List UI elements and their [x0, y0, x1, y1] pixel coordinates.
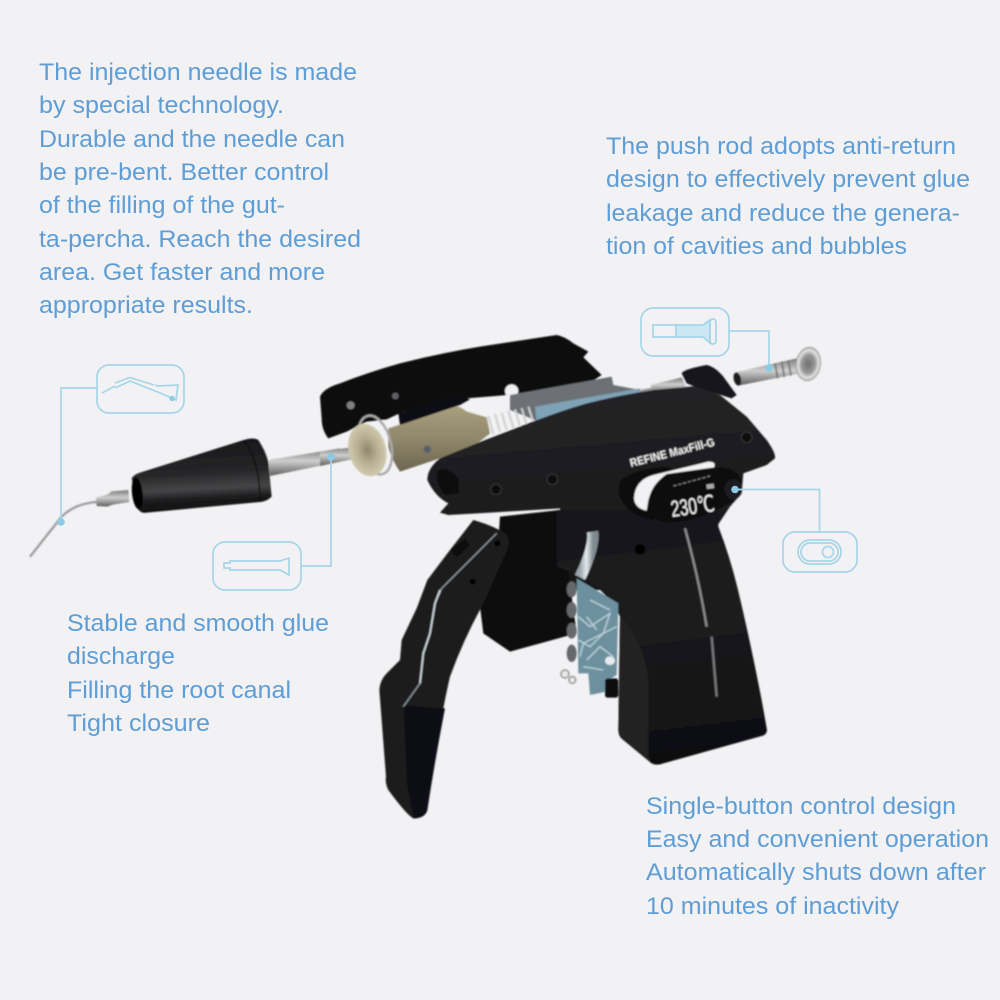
- trigger holes: [470, 579, 476, 585]
- callout box: button: [783, 532, 857, 572]
- callout: syringe icon: [213, 453, 335, 590]
- text block: glue discharge: discharge: [67, 643, 175, 670]
- leader line: screw: [729, 331, 769, 368]
- power button: [725, 479, 742, 499]
- needle tip: [30, 502, 97, 557]
- shell holes: [347, 401, 355, 409]
- needle assembly: [30, 438, 340, 557]
- dark slot surround: [618, 467, 687, 520]
- text block: injection needle: The injection needle is made: [39, 59, 357, 86]
- small component: [561, 670, 576, 683]
- main gun body: [427, 386, 775, 590]
- text block: glue discharge: Tight closure: [67, 710, 210, 737]
- callout box: syringe: [213, 542, 301, 590]
- text block: injection needle: appropriate results.: [39, 292, 253, 319]
- text block: push rod: tion of cavities and bubbles: [606, 233, 907, 260]
- text block: injection needle: area. Get faster and more: [39, 259, 325, 286]
- icon: screw: [653, 325, 676, 337]
- anchor dot: rod: [327, 453, 335, 461]
- trigger highlight: [403, 533, 497, 707]
- leader line: needle: [61, 388, 97, 522]
- text block: single-button control: [646, 793, 989, 920]
- leader line: rod: [301, 457, 331, 566]
- barrel screw: [424, 446, 431, 453]
- silver tube: [580, 532, 593, 577]
- ring: [352, 412, 398, 478]
- text block: glue discharge: Stable and smooth glue: [67, 610, 329, 637]
- grip hole: [635, 544, 645, 555]
- callout: button icon: [731, 486, 857, 572]
- spring: [488, 407, 533, 434]
- display top line: [673, 476, 710, 486]
- body screws: [491, 432, 752, 495]
- capacitors: [567, 581, 577, 662]
- product illustration: exploded glue gun: [30, 335, 823, 818]
- grip lower panel: [618, 617, 652, 763]
- push barrel rod: [268, 448, 340, 476]
- rear rod: [640, 387, 653, 396]
- anchor dot: needle: [57, 518, 65, 526]
- text block: push rod: The push rod adopts anti-return: [606, 133, 956, 160]
- inner dark block: [480, 510, 577, 652]
- text block: injection needle: ta-percha. Reach the desired: [39, 226, 361, 253]
- text block: push rod: leakage and reduce the genera-: [606, 200, 960, 227]
- text block: push rod: [606, 133, 970, 260]
- text block: glue discharge: [67, 610, 329, 737]
- icon: bent needle: [102, 378, 178, 400]
- white slot: [634, 462, 715, 511]
- cone opening: [130, 477, 144, 510]
- callout: needle icon: [57, 365, 184, 526]
- temperature reading: 230℃: [669, 490, 716, 522]
- blue inner plate: [535, 388, 640, 421]
- tan barrel: [388, 406, 490, 472]
- barrel rod: [320, 447, 357, 466]
- needle hub: [96, 490, 129, 507]
- inner gray plate: [510, 377, 640, 421]
- grip and trigger: [379, 510, 767, 818]
- callout box: screw: [641, 308, 729, 356]
- text block: single-button control: Automatically shuts down after: [646, 859, 986, 886]
- circuit board: [577, 578, 618, 695]
- battery icon: [706, 483, 714, 489]
- text block: injection needle: [39, 59, 361, 319]
- upper housing shell: [320, 335, 775, 590]
- black cone: [132, 438, 272, 513]
- grip highlights: [685, 528, 707, 627]
- trigger lever: [379, 520, 509, 818]
- text block: single-button control: 10 minutes of inactivity: [646, 893, 899, 920]
- text block: single-button control: Single-button control design: [646, 793, 956, 820]
- grip: [557, 510, 767, 765]
- icon: syringe: [224, 558, 289, 575]
- text block: injection needle: be pre-bent. Better control: [39, 159, 329, 186]
- front disc: [343, 420, 392, 480]
- text block: single-button control: Easy and convenient operation: [646, 826, 989, 853]
- callout box: needle: [97, 365, 184, 413]
- icon: switch: [798, 540, 841, 564]
- text block: injection needle: of the filling of the gut-: [39, 192, 285, 219]
- rear collar: [651, 377, 687, 393]
- black cap: [682, 365, 737, 398]
- text block: glue discharge: Filling the root canal: [67, 677, 291, 704]
- display and label: [618, 462, 742, 523]
- text block: injection needle: Durable and the needle can: [39, 126, 345, 153]
- push rod screw: [732, 345, 823, 386]
- leader line: button: [735, 490, 820, 532]
- brand label: REFINE MaxFill-G: [629, 437, 716, 470]
- text block: push rod: design to effectively prevent glue: [606, 166, 970, 193]
- black clip: [398, 394, 470, 425]
- OLED display: [648, 467, 741, 523]
- trigger notches: [450, 538, 470, 557]
- front barrel opening: [437, 469, 458, 495]
- text block: injection needle: by special technology.: [39, 92, 284, 119]
- anchor dot: button: [731, 486, 739, 493]
- circuit traces: [578, 600, 617, 670]
- cone ridge: [243, 441, 261, 502]
- callout: screw icon: [641, 308, 773, 372]
- anchor dot: screw: [765, 364, 773, 372]
- black connector: [605, 678, 618, 698]
